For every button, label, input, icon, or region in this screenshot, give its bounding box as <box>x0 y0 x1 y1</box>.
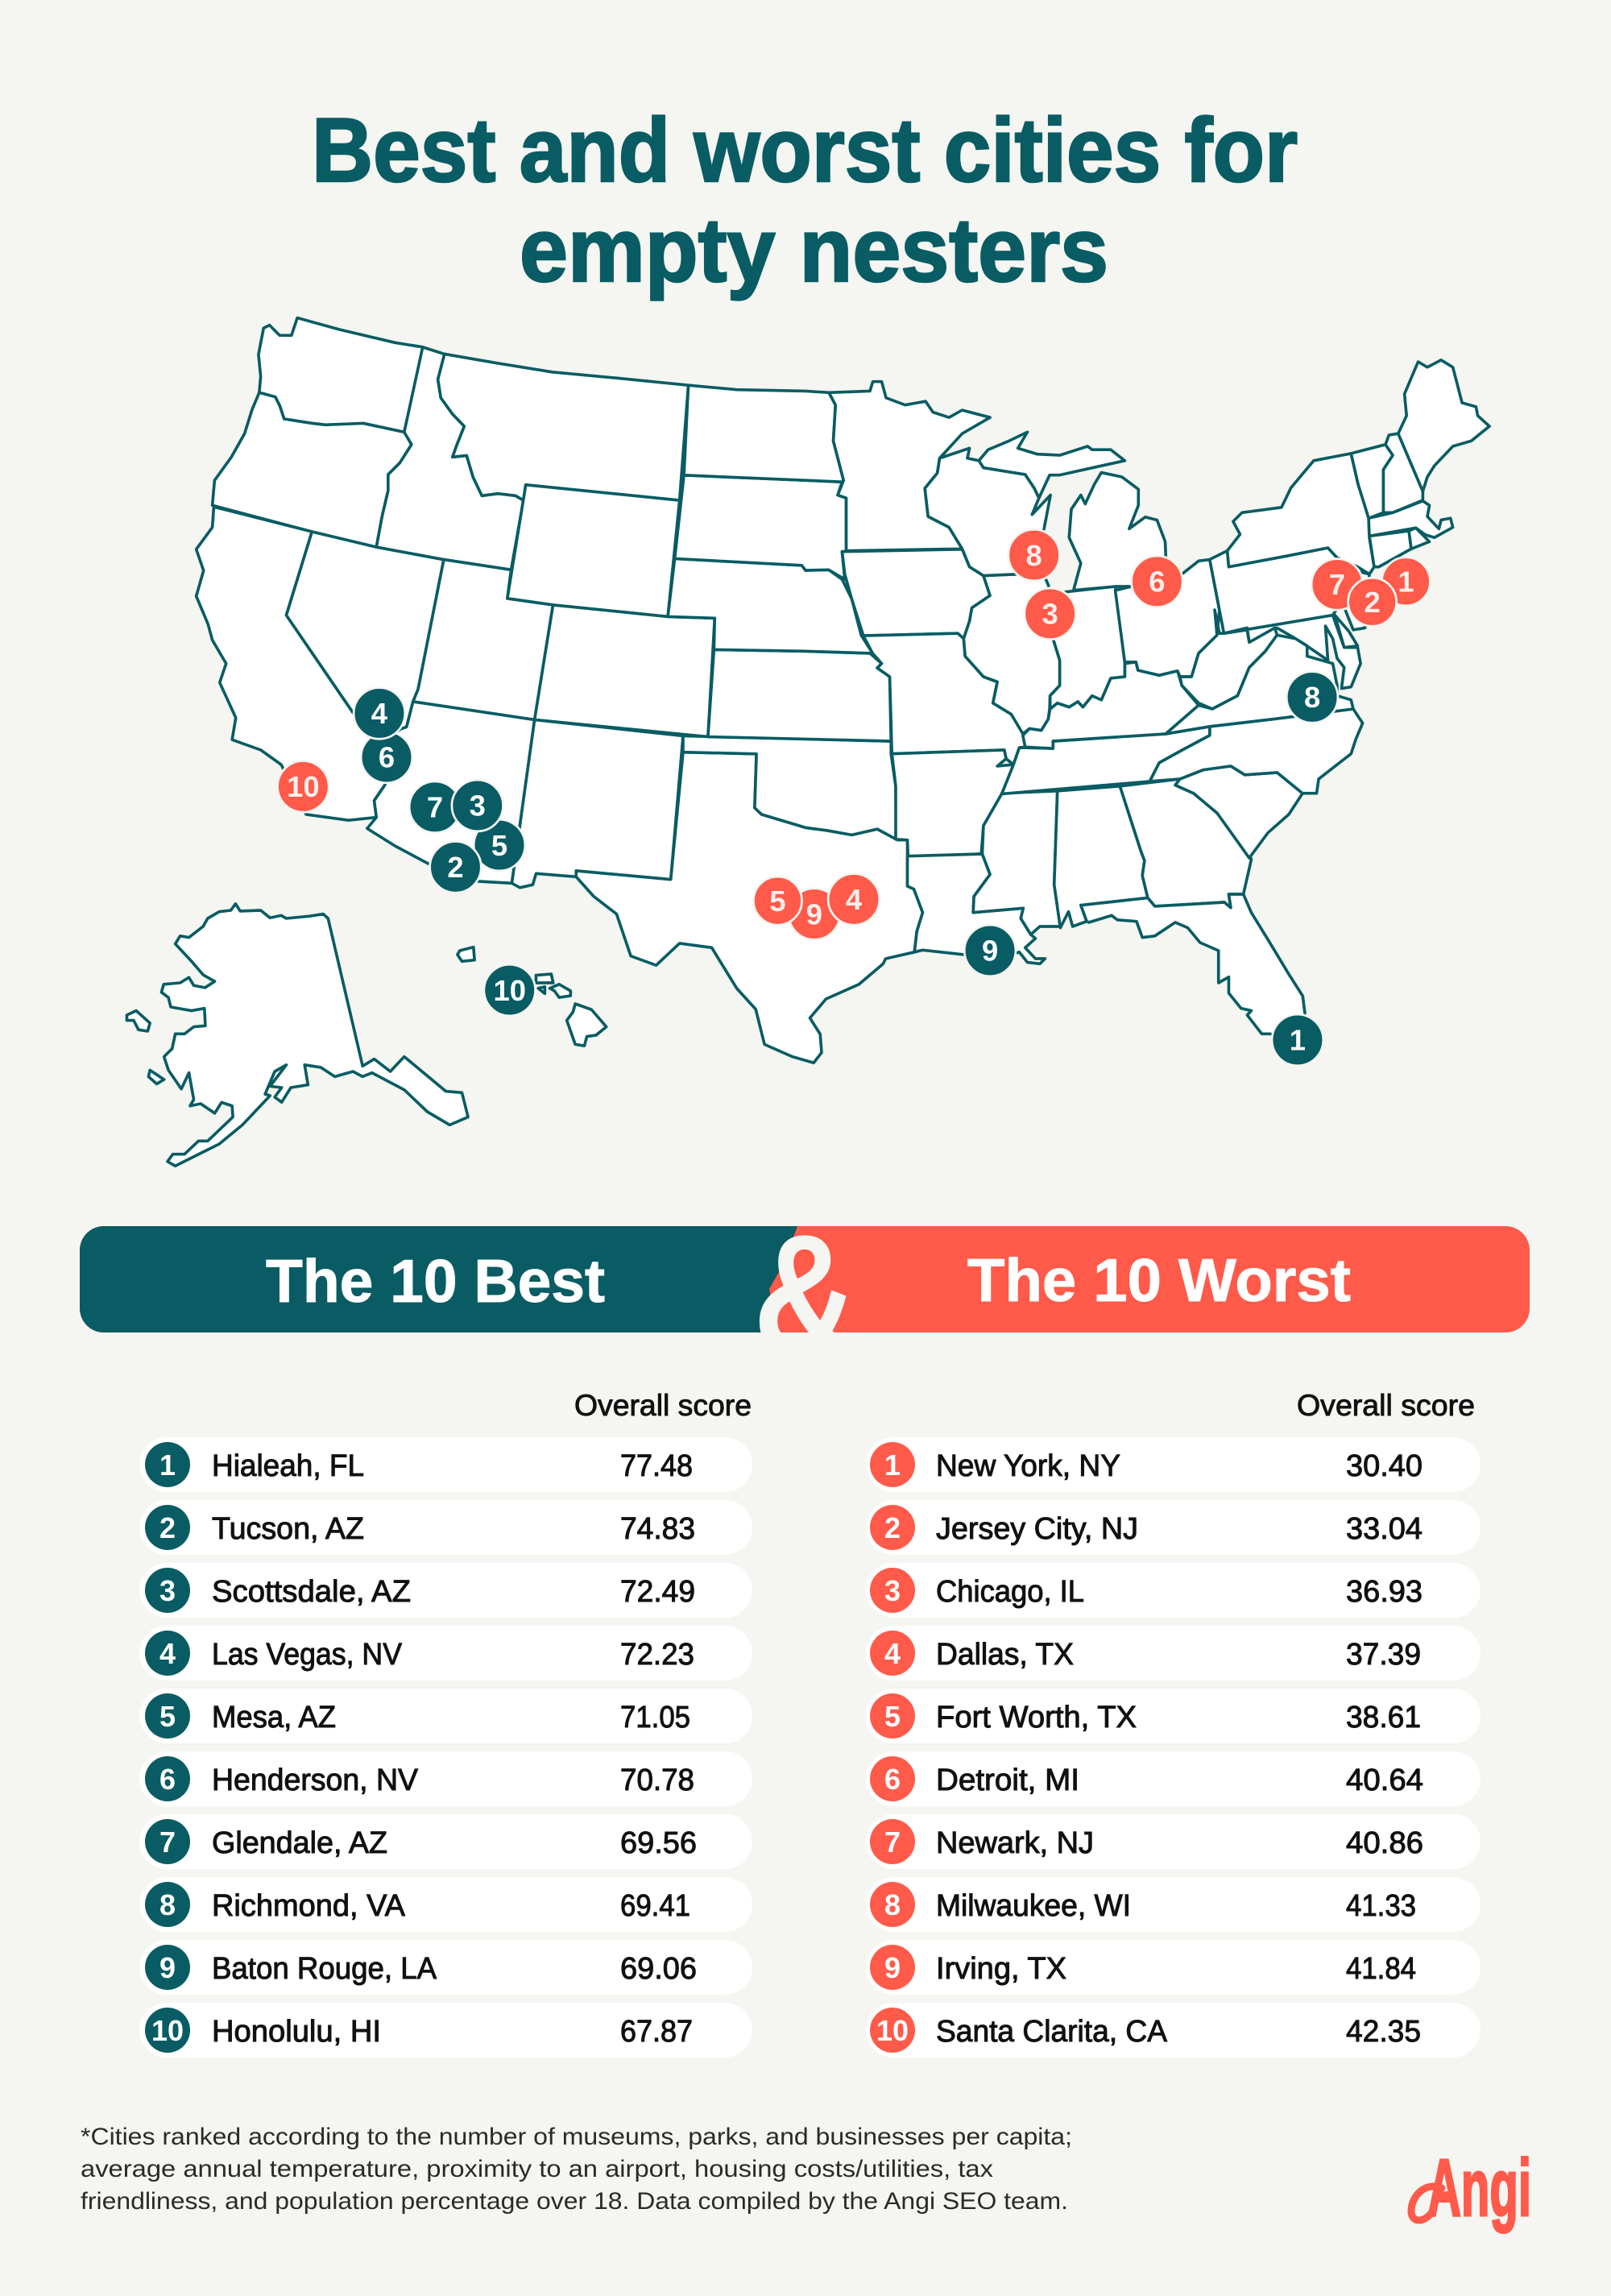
state: Arkansas <box>892 750 1013 857</box>
state: Georgia <box>1120 779 1251 908</box>
row: Detroit: 40.64 <box>1346 1763 1423 1797</box>
marker: worst 2 <box>1348 578 1397 626</box>
title: empty nesters <box>520 200 1108 300</box>
marker: worst 9: 9 <box>806 897 822 930</box>
marker: best 3 <box>452 780 503 831</box>
row: Tucson: 74.83 <box>620 1512 695 1546</box>
row: Milwaukee: 8 <box>884 1888 901 1921</box>
marker: worst 8 <box>1008 529 1059 581</box>
row: Las Vegas: Las Vegas, NV <box>212 1638 403 1672</box>
row: Dallas: 37.39 <box>1346 1638 1421 1672</box>
marker: worst 8: 8 <box>1026 539 1042 572</box>
footnote: average annual temperature, proximity to an airport, housing costs/utilities, tax <box>81 2156 993 2182</box>
row: Tucson <box>139 1500 752 1555</box>
row: Santa Clarita: 42.35 <box>1346 2015 1421 2049</box>
state: Louisiana <box>908 854 1045 964</box>
row: Santa Clarita <box>866 2003 1481 2058</box>
row: Scottsdale: 3 <box>159 1574 176 1607</box>
row: Hialeah: 1 <box>159 1448 176 1482</box>
row: Jersey City: 33.04 <box>1346 1512 1423 1546</box>
state: Kentucky <box>1023 662 1199 748</box>
row: Fort Worth: 5 <box>884 1700 901 1733</box>
row: Scottsdale: 72.49 <box>620 1575 695 1609</box>
row: Fort Worth <box>866 1689 1481 1743</box>
state: New Jersey <box>1340 567 1369 630</box>
state: North Carolina <box>1149 709 1363 794</box>
Hawaii <box>458 947 607 1046</box>
marker: best 10 <box>484 964 536 1016</box>
marker: best 2 <box>430 842 481 893</box>
row: Baton Rouge: 69.06 <box>620 1952 697 1986</box>
state: Pennsylvania <box>1210 548 1348 633</box>
row: Newark: 40.86 <box>1346 1826 1423 1860</box>
row: Milwaukee <box>866 1877 1481 1932</box>
ampersand: & <box>753 1199 858 1390</box>
Alaska <box>126 904 468 1166</box>
state: Idaho <box>376 347 524 570</box>
state: Wisconsin <box>925 448 1050 576</box>
row: Baton Rouge <box>139 1940 752 1995</box>
marker: best 6: 6 <box>379 741 395 774</box>
marker: best 5 <box>474 819 525 871</box>
footnote <box>81 2124 1072 2215</box>
worst city markers <box>278 529 1430 939</box>
marker: best 9 <box>964 925 1016 976</box>
marker: worst 4 <box>828 874 880 925</box>
marker: best 7 <box>409 781 461 833</box>
title <box>312 100 1298 300</box>
marker: best 9: 9 <box>982 935 998 968</box>
row: Glendale: 7 <box>159 1826 176 1859</box>
row: Mesa: 5 <box>159 1700 176 1733</box>
state: California <box>197 507 385 820</box>
row: Hialeah: Hialeah, FL <box>212 1449 364 1483</box>
state: Illinois <box>963 574 1060 734</box>
footnote: *Cities ranked according to the number of museums, parks, and businesses per capita; <box>81 2124 1072 2150</box>
state: Nevada <box>286 532 444 740</box>
marker: worst 1 <box>1381 557 1430 606</box>
row: Henderson: 6 <box>159 1763 176 1796</box>
row: Mesa <box>139 1689 752 1743</box>
marker: worst 2: 2 <box>1365 586 1381 619</box>
state: New Mexico <box>511 719 683 888</box>
row: Jersey City: Jersey City, NJ <box>936 1512 1138 1546</box>
row: Dallas: 4 <box>884 1637 901 1670</box>
marker: best 8: 8 <box>1304 681 1320 714</box>
state: South Dakota <box>675 475 847 579</box>
row: Irving: 41.84 <box>1346 1952 1416 1986</box>
state: Tennessee <box>1002 727 1210 794</box>
column header: best overall score: Overall score <box>574 1389 752 1422</box>
state: Colorado <box>535 605 714 737</box>
marker: worst 3 <box>1025 588 1075 640</box>
row: Scottsdale: Scottsdale, AZ <box>212 1575 411 1609</box>
state: West Virginia <box>1180 610 1277 709</box>
marker: worst 1: 1 <box>1398 566 1414 599</box>
Angi logo <box>1411 2143 1531 2233</box>
row: Henderson <box>139 1751 752 1806</box>
state: Vermont <box>1351 445 1393 518</box>
state: Connecticut <box>1369 531 1411 567</box>
state: Virginia <box>1166 635 1353 734</box>
row: Irving: 9 <box>884 1951 901 1984</box>
state: Utah <box>413 560 553 719</box>
row: Richmond: 69.41 <box>620 1889 690 1923</box>
marker: best 3: 3 <box>470 790 486 823</box>
row: Tucson: Tucson, AZ <box>212 1512 364 1546</box>
row: Chicago: 36.93 <box>1346 1575 1423 1609</box>
state: Massachusetts <box>1369 501 1453 537</box>
state: Alabama <box>1054 786 1148 928</box>
state: Wyoming <box>507 485 680 616</box>
Angi logo: Angi <box>1427 2143 1531 2233</box>
row: Scottsdale <box>139 1563 752 1618</box>
row: Henderson: Henderson, NV <box>212 1763 419 1797</box>
row: Milwaukee: 41.33 <box>1346 1889 1416 1923</box>
marker: best 1 <box>1272 1014 1323 1066</box>
marker: worst 5: 5 <box>769 885 786 918</box>
row: Mesa: Mesa, AZ <box>212 1701 336 1734</box>
marker: best 2: 2 <box>447 851 464 884</box>
marker: best 7: 7 <box>427 791 443 824</box>
title: Best and worst cities for <box>312 100 1298 201</box>
heading: the 10 worst: The 10 Worst <box>967 1246 1351 1314</box>
row: Mesa: 71.05 <box>620 1701 690 1734</box>
state: Indiana <box>1050 586 1124 709</box>
row: Detroit: 6 <box>884 1763 901 1796</box>
row: Chicago: Chicago, IL <box>936 1575 1084 1609</box>
row: Henderson: 70.78 <box>620 1763 694 1797</box>
state: Montana <box>438 354 689 500</box>
marker: best 4: 4 <box>371 697 388 730</box>
state: New York <box>1228 454 1374 574</box>
marker: best 10: 10 <box>494 974 526 1007</box>
row: Glendale: 69.56 <box>620 1826 697 1860</box>
state: North Dakota <box>684 385 843 482</box>
row: Detroit <box>866 1751 1481 1806</box>
row: Baton Rouge: Baton Rouge, LA <box>212 1952 437 1986</box>
column header: worst overall score: Overall score <box>1297 1389 1475 1422</box>
marker: worst 9 <box>789 889 840 939</box>
row: Las Vegas <box>139 1626 752 1681</box>
row: Newark: 7 <box>884 1826 901 1859</box>
row: Richmond: Richmond, VA <box>212 1889 406 1923</box>
state: Maine <box>1398 360 1489 491</box>
banner <box>80 1226 1530 1332</box>
marker: best 5: 5 <box>491 829 507 862</box>
marker: worst 3: 3 <box>1042 598 1058 631</box>
row: Glendale <box>139 1814 752 1869</box>
row: Chicago <box>866 1563 1481 1618</box>
state: Minnesota <box>829 382 990 551</box>
state: Texas <box>576 752 922 1063</box>
marker: best 8 <box>1286 672 1338 723</box>
row: Jersey City <box>866 1500 1481 1555</box>
marker: best 6 <box>361 731 412 783</box>
state: Maryland <box>1224 615 1360 689</box>
table: the 10 best <box>139 1437 752 2058</box>
marker: worst 6 <box>1132 556 1182 607</box>
row: Las Vegas: 72.23 <box>620 1638 694 1672</box>
best city markers <box>354 672 1338 1066</box>
heading: the 10 best: The 10 Best <box>266 1247 605 1315</box>
row: Honolulu: Honolulu, HI <box>212 2015 381 2049</box>
footnote: friendliness, and population percentage over 18. Data compiled by the Angi SEO team. <box>81 2188 1068 2215</box>
marker: worst 4: 4 <box>846 883 863 916</box>
state: Arizona <box>367 702 535 883</box>
state: Oregon <box>213 392 412 547</box>
state: Rhode Island <box>1409 528 1430 549</box>
row: Dallas <box>866 1626 1481 1681</box>
row: Glendale: Glendale, AZ <box>212 1826 387 1860</box>
row: Fort Worth: 38.61 <box>1346 1701 1421 1734</box>
row: Santa Clarita: Santa Clarita, CA <box>936 2015 1168 2049</box>
table: the 10 worst <box>866 1437 1481 2058</box>
row: Irving: Irving, TX <box>936 1952 1066 1986</box>
row: Tucson: 2 <box>159 1511 176 1544</box>
row: Jersey City: 2 <box>884 1511 901 1544</box>
state: South Carolina <box>1175 766 1302 858</box>
contiguous states <box>197 318 1489 1063</box>
state: Iowa <box>842 549 990 639</box>
row: New York: 1 <box>884 1448 901 1482</box>
marker: worst 6: 6 <box>1149 566 1165 599</box>
row: Las Vegas: 4 <box>159 1637 176 1670</box>
state: Nebraska <box>668 558 872 653</box>
row: Richmond: 8 <box>159 1888 176 1921</box>
row: Honolulu <box>139 2003 752 2058</box>
row: Newark <box>866 1814 1481 1869</box>
row: Baton Rouge: 9 <box>159 1951 176 1984</box>
row: Fort Worth: Fort Worth, TX <box>936 1701 1137 1734</box>
state: Florida <box>1081 894 1305 1040</box>
marker: best 1: 1 <box>1290 1024 1306 1057</box>
state: Oklahoma <box>683 736 897 839</box>
row: Newark: Newark, NJ <box>936 1826 1094 1860</box>
row: Milwaukee: Milwaukee, WI <box>936 1889 1131 1923</box>
state: Kansas <box>708 649 891 741</box>
row: Detroit: Detroit, MI <box>936 1763 1079 1797</box>
row: Santa Clarita: 10 <box>876 2014 909 2047</box>
row: Irving <box>866 1940 1481 1995</box>
row: Honolulu: 67.87 <box>620 2015 693 2049</box>
row: Honolulu: 10 <box>151 2014 184 2047</box>
row: New York <box>866 1437 1481 1492</box>
marker: worst 10: 10 <box>287 770 320 803</box>
marker: worst 10 <box>278 761 329 812</box>
marker: worst 7: 7 <box>1329 568 1345 601</box>
row: Richmond <box>139 1877 752 1932</box>
map of the United States <box>126 318 1489 1166</box>
state: Missouri <box>863 633 1025 765</box>
state: Michigan upper peninsula <box>979 432 1124 498</box>
marker: worst 7 <box>1311 559 1363 610</box>
row: Hialeah <box>139 1437 752 1492</box>
state: Mississippi <box>973 790 1060 935</box>
row: Chicago: 3 <box>884 1574 901 1607</box>
state: Ohio <box>1116 560 1220 677</box>
row: Dallas: Dallas, TX <box>936 1638 1074 1672</box>
row: New York: New York, NY <box>936 1449 1120 1483</box>
marker: best 4 <box>354 688 405 739</box>
state: Delaware <box>1335 615 1357 648</box>
row: Hialeah: 77.48 <box>620 1449 693 1483</box>
state: Washington <box>259 318 423 432</box>
state: Michigan lower peninsula <box>1069 473 1166 591</box>
marker: worst 5 <box>753 877 801 925</box>
state: New Hampshire <box>1383 433 1423 512</box>
row: New York: 30.40 <box>1346 1449 1423 1483</box>
